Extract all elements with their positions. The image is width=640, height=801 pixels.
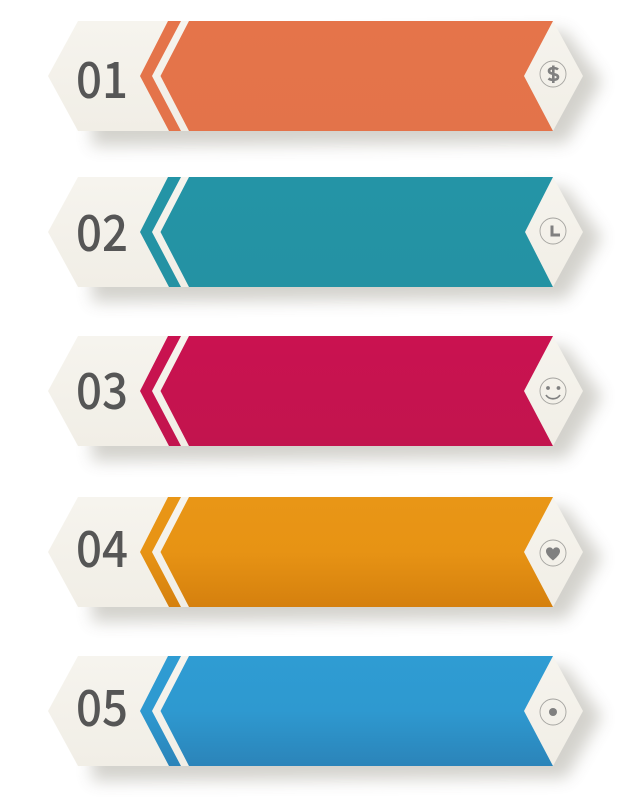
- cream hexagon base: [48, 497, 583, 607]
- number 01: 01: [76, 41, 128, 113]
- coloured chevron stripe: [140, 656, 181, 766]
- coloured chevron stripe: [140, 21, 181, 131]
- main colour bar: [160, 21, 553, 131]
- drop shadow: [92, 507, 602, 622]
- coloured chevron stripe: [140, 177, 181, 287]
- panel: row 04: [48, 497, 602, 622]
- main colour bar: [160, 336, 553, 446]
- number 03: 03: [76, 352, 128, 424]
- coloured chevron stripe: [140, 497, 181, 607]
- cream hexagon base: [48, 336, 583, 446]
- icon: dollar: [540, 61, 566, 87]
- main colour bar: [160, 177, 553, 287]
- coloured chevron stripe: [140, 336, 181, 446]
- panel: row 02: [48, 177, 602, 302]
- panel: row 05: [48, 656, 602, 781]
- icon: target dot: [540, 699, 566, 725]
- main colour bar: [160, 497, 553, 607]
- icon: smiley: [540, 378, 566, 404]
- drop shadow: [92, 187, 602, 302]
- panel: row 03: [48, 336, 602, 461]
- main colour bar: [160, 656, 553, 766]
- cream hexagon base: [48, 656, 583, 766]
- drop shadow: [92, 666, 602, 781]
- cream hexagon base: [48, 21, 583, 131]
- drop shadow: [92, 346, 602, 461]
- icon: clock: [540, 218, 566, 244]
- icon: heart: [540, 540, 566, 566]
- number 02: 02: [76, 194, 128, 266]
- number 04: 04: [76, 510, 128, 582]
- number 05: 05: [76, 669, 128, 741]
- cream hexagon base: [48, 177, 583, 287]
- drop shadow: [92, 31, 602, 146]
- panel: row 01: [48, 21, 602, 146]
